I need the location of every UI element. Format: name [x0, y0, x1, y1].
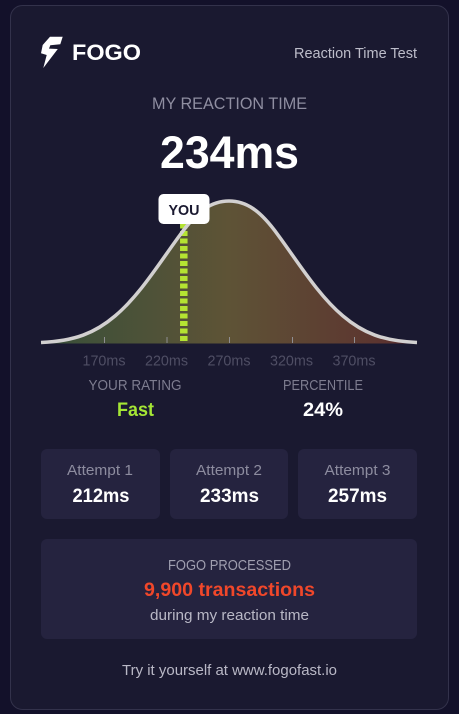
you badge	[158, 194, 210, 224]
header label: Reaction Time Test	[294, 45, 418, 62]
panel: attempt 3: Attempt 3	[324, 462, 390, 479]
panel: fogo processed: 9,900 transactions	[144, 580, 315, 601]
tick marks	[104, 337, 354, 343]
your time marker line	[180, 222, 188, 341]
stat: your rating: Fast	[117, 400, 155, 421]
panel: attempt 2: 233ms	[200, 486, 259, 507]
panel: attempt 1: 212ms	[72, 486, 130, 507]
panel: attempt 1	[41, 449, 160, 519]
chart: reaction time distribution	[41, 194, 417, 370]
axis labels: 270ms	[208, 352, 250, 370]
stat: percentile	[283, 377, 363, 421]
logo wordmark: FOGO	[72, 40, 141, 65]
curve fill	[41, 201, 417, 344]
axis labels: 370ms	[332, 352, 376, 370]
heading: my reaction time: MY REACTION TIME	[152, 94, 307, 113]
you badge: YOU	[168, 202, 200, 219]
logo: FOGO	[41, 37, 141, 68]
panel: attempt 1: Attempt 1	[67, 462, 133, 479]
panel: fogo processed: during my reaction time	[150, 607, 309, 624]
panel: attempt 3: 257ms	[328, 486, 387, 507]
panel: fogo processed: FOGO PROCESSED	[168, 557, 291, 574]
axis labels: 220ms	[145, 352, 188, 370]
stat: your rating	[88, 377, 182, 421]
curve line	[41, 201, 417, 342]
axis labels: 320ms	[270, 352, 313, 370]
panel: attempt 2: Attempt 2	[196, 462, 262, 479]
footer call to action: Try it yourself at www.fogofast.io	[122, 662, 337, 679]
stat: your rating: YOUR RATING	[88, 377, 182, 394]
panel: attempt 2	[170, 449, 288, 519]
panel: attempt 3	[298, 449, 417, 519]
icon: lightning bolt	[41, 37, 63, 68]
panel: fogo processed	[41, 539, 417, 639]
axis labels	[82, 352, 376, 370]
axis labels: 170ms	[82, 352, 126, 370]
reaction time value: 234ms	[160, 127, 299, 178]
stat: percentile: PERCENTILE	[283, 377, 363, 394]
stat: percentile: 24%	[303, 400, 343, 421]
